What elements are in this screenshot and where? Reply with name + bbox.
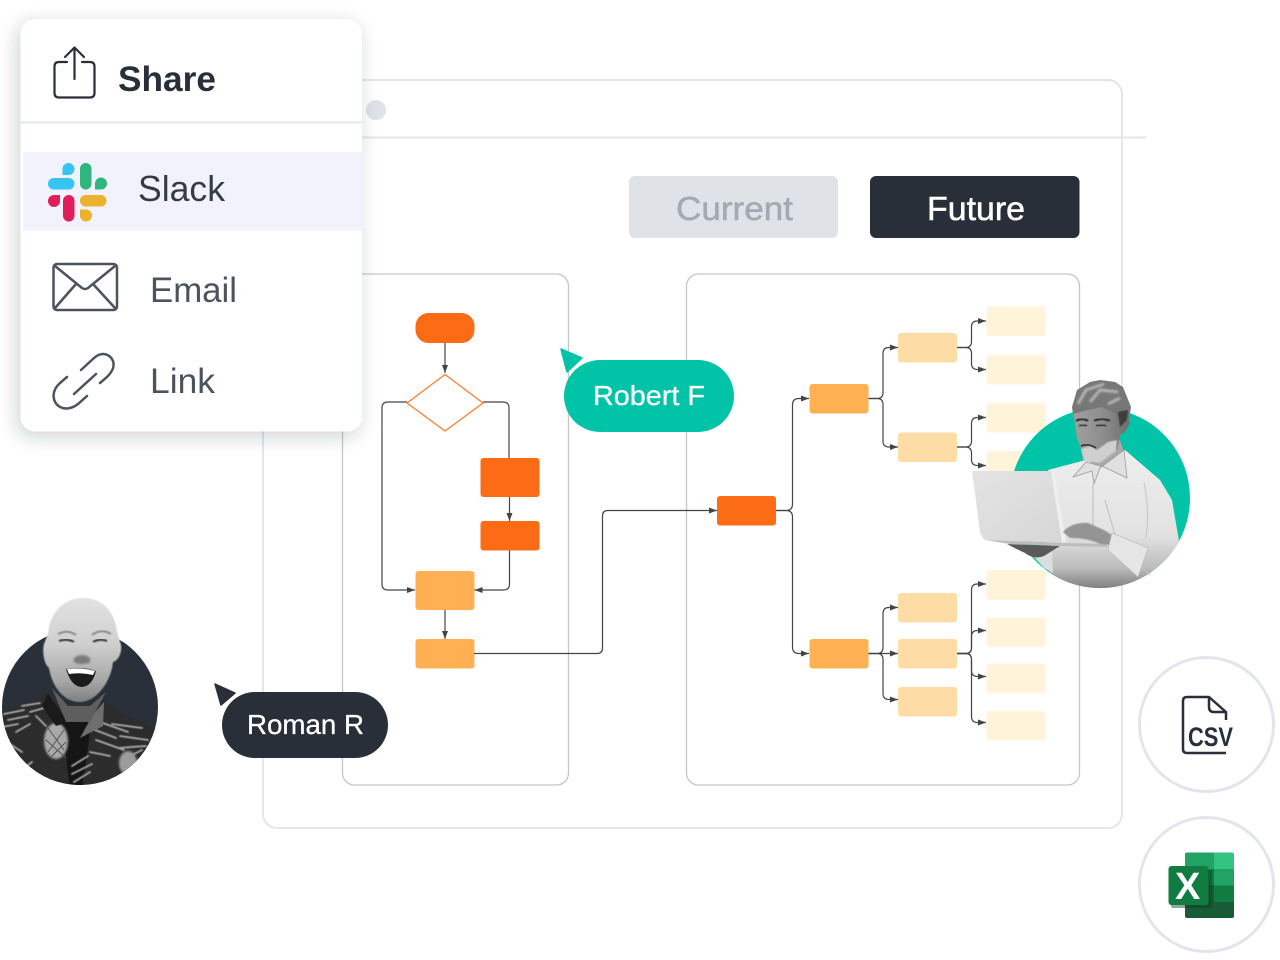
- neck: [52, 688, 106, 722]
- cuff: [1108, 533, 1148, 577]
- label: X: X: [1175, 866, 1201, 908]
- cursor label: Robert F: [561, 349, 734, 432]
- button: Future: [870, 176, 1080, 238]
- person: Roman: [0, 598, 160, 790]
- icon: share: [54, 48, 94, 98]
- icon: link: [54, 354, 114, 408]
- cursor label: Roman R: [215, 684, 388, 758]
- nose: [74, 655, 90, 664]
- button: Current: Current: [676, 190, 793, 227]
- browser window: [263, 80, 1146, 828]
- upper hand: [1063, 523, 1112, 545]
- shirt: [1048, 450, 1179, 588]
- shirt: [0, 692, 160, 790]
- person: Robert: [972, 380, 1190, 588]
- button: Current: [629, 176, 838, 238]
- cursor label: Robert F: Robert F: [593, 380, 705, 411]
- icon: Excel badge: [1140, 818, 1274, 952]
- hair: [1072, 380, 1131, 427]
- panel: current flowchart frame: [342, 274, 568, 785]
- icon: email: [54, 264, 117, 310]
- beard: [1081, 440, 1117, 463]
- label: Slack: Slack: [138, 168, 226, 209]
- lower hand: [1007, 544, 1060, 557]
- label: Email: Email: [150, 271, 237, 310]
- collar: [1073, 450, 1127, 484]
- label: CSV: CSV: [1188, 722, 1233, 752]
- sleeve under laptop: [1034, 550, 1053, 573]
- head: [43, 598, 121, 702]
- panel: future tree frame: [686, 274, 1080, 785]
- cursor label: Roman R: Roman R: [247, 709, 364, 740]
- icon: CSV badge: [1140, 658, 1274, 792]
- label: Link: Link: [150, 361, 215, 401]
- share card: [20, 19, 362, 432]
- button: Future: Future: [927, 190, 1025, 227]
- neck: [1086, 440, 1124, 472]
- eyes: [1076, 419, 1110, 421]
- eyes and brows: [58, 631, 111, 635]
- heading: Share: Share: [118, 60, 216, 99]
- icon: Slack: [48, 163, 107, 222]
- laptop: [972, 471, 1062, 543]
- connector between charts: [474, 510, 717, 654]
- mouth: [66, 668, 96, 687]
- future tree chart: [717, 306, 1046, 740]
- row highlight: Slack: [23, 152, 362, 230]
- face: [1073, 405, 1130, 463]
- current flowchart: [382, 313, 540, 668]
